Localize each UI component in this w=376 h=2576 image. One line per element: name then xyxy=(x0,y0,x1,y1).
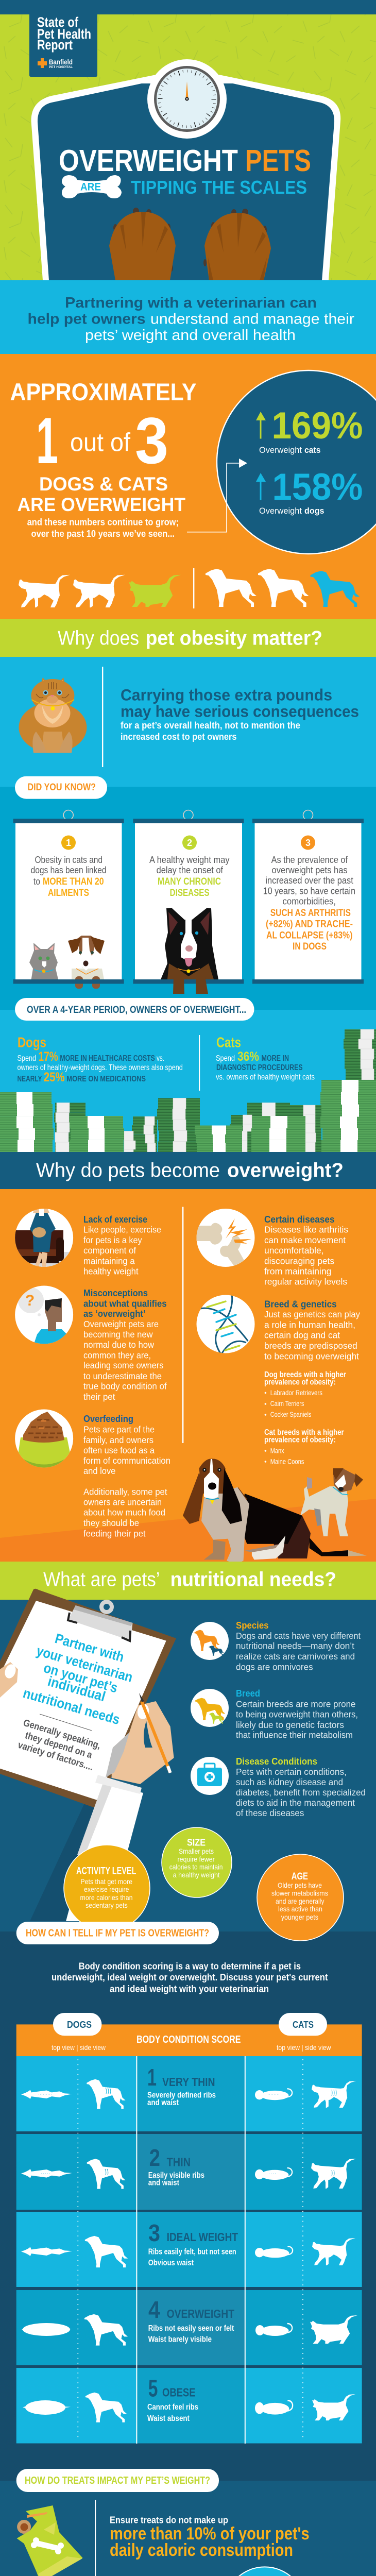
table header: top view | side view xyxy=(52,2043,106,2052)
text: certain diseases: from maintaining xyxy=(264,1266,332,1277)
card 3: comorbidities: AL COLLAPSE (+83%) xyxy=(266,930,352,941)
factor: activity level: more calories than xyxy=(80,1893,133,1902)
row 1: very thin: VERY THIN xyxy=(162,2075,215,2089)
text: treats: daily caloric consumption xyxy=(110,2540,293,2560)
list: dog breeds xyxy=(264,1370,346,1418)
hero background xyxy=(0,14,376,280)
factor: species: dogs are omnivores xyxy=(236,1662,313,1672)
pill: how can I tell: HOW CAN I TELL IF MY PET IS OVERWEIGHT? xyxy=(26,1927,209,1939)
factor: age xyxy=(257,1854,344,1941)
row 1: very thin: 1 xyxy=(147,2064,157,2091)
factor: size: Smaller pets xyxy=(179,1847,214,1855)
list: cat breeds: prevalence of obesity: xyxy=(264,1436,336,1445)
card 2: chronic diseases: MANY CHRONIC xyxy=(158,876,221,887)
card 3: comorbidities: increased over the past xyxy=(265,875,353,886)
row 5: obese: OBESE xyxy=(162,2385,196,2399)
panel: prevalence: DOGS & CATS xyxy=(39,473,168,495)
card 1: ailments: AILMENTS xyxy=(48,888,89,899)
row 3: ideal weight: 3 xyxy=(148,2219,160,2246)
card 1: ailments: Obesity in cats and xyxy=(35,855,102,865)
text: dogs costs: 25% xyxy=(44,1070,65,1084)
factor: disease conditions: of these diseases xyxy=(236,1808,304,1818)
list: cat breeds: Cat breeds with a higher xyxy=(264,1428,344,1437)
text: breed and genetics xyxy=(264,1299,360,1361)
card 2: chronic diseases: 2 xyxy=(187,838,192,848)
text: overfeeding: about how much food xyxy=(83,1507,165,1518)
text: breed and genetics: a role in human health, xyxy=(264,1320,355,1330)
icon: weighing scale xyxy=(31,59,340,280)
factor: species: Species xyxy=(236,1620,269,1631)
factor: activity level: Pets that get more xyxy=(80,1877,132,1886)
factor: activity level xyxy=(64,1845,150,1931)
panel: prevalence: and these numbers continue to grow; xyxy=(27,517,179,528)
stat circle: 158% xyxy=(272,466,363,508)
factor: age: slower metabolisms xyxy=(271,1889,328,1897)
icon: man with question mark xyxy=(15,1286,73,1350)
panel: treats background xyxy=(0,2481,376,2576)
heading: why does pet obesity matter xyxy=(0,619,376,657)
panel: prevalence: 1 xyxy=(36,404,58,477)
heading: why do pets become overweight: overweight? xyxy=(227,1159,344,1182)
clipboard text: your veterinarian xyxy=(35,1643,134,1685)
card 3: comorbidities xyxy=(252,810,364,984)
icon: woman on couch xyxy=(15,1208,73,1273)
text: treats: Ensure treats do not make up xyxy=(110,2515,228,2526)
stat circle: Overweight xyxy=(259,506,302,516)
panel: prevalence: ARE OVERWEIGHT xyxy=(18,494,185,515)
card 3: comorbidities: 3 xyxy=(305,838,311,848)
cat and dog silhouettes xyxy=(19,568,360,608)
pill: over a 4-year period xyxy=(15,998,254,1021)
factor: activity level: sedentary pets xyxy=(86,1901,128,1909)
factor: species: realize cats are carnivores and xyxy=(236,1651,355,1662)
card 2: chronic diseases: delay the onset of xyxy=(157,865,224,875)
card 3: comorbidities: (+82%) AND TRACHE- xyxy=(266,919,353,930)
text: certain diseases xyxy=(264,1214,348,1287)
icon: man with question mark: ? xyxy=(25,1292,35,1309)
panel: prevalence: over the past 10 years we’ve seen... xyxy=(31,529,175,539)
panel: costs background xyxy=(0,1010,376,1152)
panel: prevalence xyxy=(0,354,376,619)
title xyxy=(59,144,311,198)
text: cats costs xyxy=(216,1035,315,1082)
text: breed and genetics: to becoming overweight xyxy=(264,1351,359,1361)
icon: vet hands with pen xyxy=(0,1662,174,1921)
factor: breed: that influence their metabolism xyxy=(236,1730,353,1740)
list: dog breeds: Cairn Terriers xyxy=(270,1399,304,1408)
text: breed and genetics: breeds are predisposed xyxy=(264,1341,357,1351)
text: misconceptions: leading some owners xyxy=(83,1360,164,1370)
heading: carrying extra pounds xyxy=(121,686,359,742)
icon: collie paws xyxy=(173,976,208,994)
factor: size: SIZE xyxy=(187,1837,206,1849)
list: cat breeds xyxy=(264,1428,344,1466)
intro panel: understand and manage their xyxy=(150,311,354,328)
row 2: thin: 2 xyxy=(149,2144,160,2171)
text: misconceptions: common they are, xyxy=(83,1350,151,1361)
text: lack of exercise: healthy weight xyxy=(83,1266,139,1277)
stat circle: cats xyxy=(304,445,320,455)
panel: prevalence: out of xyxy=(70,428,130,456)
intro panel: help pet owners xyxy=(28,311,145,328)
pill: did you know: DID YOU KNOW? xyxy=(28,782,96,793)
text: certain diseases: uncomfortable, xyxy=(264,1245,324,1256)
title: PETS xyxy=(245,144,311,178)
factor: disease conditions: diets to aid in the management xyxy=(236,1798,355,1808)
factor: species: Dogs and cats have very different xyxy=(236,1631,361,1641)
heading: nutritional needs: nutritional needs? xyxy=(170,1568,336,1590)
factor: disease conditions: Disease Conditions xyxy=(236,1756,317,1767)
text: dogs costs: Spend xyxy=(18,1054,36,1063)
card 3: comorbidities: comorbidities, xyxy=(282,896,336,907)
text: certain diseases: can make movement xyxy=(264,1235,346,1245)
factor: age: AGE xyxy=(292,1871,308,1882)
arrow xyxy=(187,459,247,532)
factor: species: nutritional needs—many don’t xyxy=(236,1640,354,1651)
heading: why does pet obesity matter: pet obesity matter? xyxy=(146,628,322,649)
logo panel: State of Pet Health Report: Pet Health xyxy=(37,26,91,42)
row backgrounds xyxy=(16,2056,362,2444)
logo panel: State of Pet Health Report: PET HOSPITAL xyxy=(49,65,73,69)
text: overfeeding: Pets are part of the xyxy=(83,1424,155,1434)
text: lack of exercise: Lack of exercise xyxy=(83,1214,147,1225)
icon: basset hound xyxy=(183,1459,367,1564)
text: overfeeding: feeding their pet xyxy=(83,1528,146,1538)
text: misconceptions: as ‘overweight’ xyxy=(83,1309,146,1319)
card 2: chronic diseases: DISEASES xyxy=(170,888,210,899)
text: misconceptions: normal due to how xyxy=(83,1340,154,1350)
text: dogs costs: NEARLY xyxy=(18,1075,42,1083)
card 1: ailments: dogs has been linked xyxy=(31,865,107,875)
factor: age: and are generally xyxy=(276,1897,324,1905)
text: lack of exercise xyxy=(83,1214,161,1277)
heading: why do pets become overweight: Why do pets become xyxy=(36,1159,220,1182)
clipboard text: on your pet’s xyxy=(42,1660,119,1696)
title: OVERWEIGHT xyxy=(59,144,238,178)
factor: breed: Certain breeds are more prone xyxy=(236,1699,355,1709)
row 1: very thin: Severely defined ribs xyxy=(147,2091,216,2100)
text: breed and genetics: Breed & genetics xyxy=(264,1299,337,1310)
text: overfeeding: family, and owners xyxy=(83,1435,153,1445)
factor: age: younger pets xyxy=(281,1913,318,1921)
table header xyxy=(16,2013,362,2056)
list: dog breeds: Labrador Retrievers xyxy=(270,1388,322,1397)
text: lack of exercise: component of xyxy=(83,1245,136,1256)
icon: treat bag xyxy=(17,2505,83,2576)
factor: activity level: ACTIVITY LEVEL xyxy=(76,1866,136,1877)
text: dogs costs: vs. xyxy=(157,1054,164,1063)
text: overfeeding xyxy=(83,1414,170,1538)
text: cats costs: Spend xyxy=(216,1054,235,1063)
text: body condition intro: underweight, ideal weight or overweight. Discuss your pet's current xyxy=(52,1972,328,1982)
title: ARE xyxy=(80,181,101,193)
row 2: thin: and waist xyxy=(148,2179,180,2188)
text: misconceptions: their pet xyxy=(83,1392,115,1402)
text: dogs costs xyxy=(18,1035,183,1084)
icon: overflowing food bowl xyxy=(15,1410,73,1468)
factor: breed xyxy=(191,1688,358,1740)
list: dog breeds: Cocker Spaniels xyxy=(270,1410,311,1418)
factor: age: less active than xyxy=(278,1905,322,1913)
factor: breed: likely due to genetic factors xyxy=(236,1720,344,1730)
heading: carrying extra pounds: for a pet’s overall health, not to mention the xyxy=(121,720,300,731)
text: misconceptions: becoming the new xyxy=(83,1329,153,1340)
body condition score table xyxy=(16,2013,362,2444)
factor: disease conditions: Pets with certain conditions, xyxy=(236,1767,347,1777)
text: certain diseases: regular activity levels xyxy=(264,1277,347,1287)
row 2: thin xyxy=(21,2144,356,2189)
logo panel: State of Pet Health Report: State of xyxy=(37,14,79,30)
factor: species xyxy=(191,1620,361,1672)
factor: disease conditions: diabetes, benefit from specialized xyxy=(236,1787,366,1798)
logo panel: State of Pet Health Report xyxy=(29,14,97,77)
icon: fat orange cat xyxy=(19,677,87,753)
panel: consequences xyxy=(0,657,376,787)
stat circle: Overweight xyxy=(259,445,302,455)
row 1: very thin xyxy=(21,2064,356,2109)
row 4: overweight: Ribs not easily seen or felt xyxy=(148,2324,234,2333)
icon: border collie xyxy=(161,908,218,979)
factor: size: a healthy weight xyxy=(173,1871,220,1879)
card 1: ailments: 1 xyxy=(66,838,71,848)
card 2: chronic diseases: A healthy weight may xyxy=(149,855,230,865)
title: TIPPING THE SCALES xyxy=(131,177,307,198)
text: treats xyxy=(110,2515,310,2560)
text: misconceptions: Overweight pets are xyxy=(83,1319,159,1329)
heading: nutritional needs: What are pets’ xyxy=(43,1568,160,1590)
text: lack of exercise: maintaining a xyxy=(83,1256,135,1266)
text: cats costs: 36% xyxy=(237,1049,259,1064)
list: cat breeds: Manx xyxy=(270,1446,284,1454)
pill: treats xyxy=(16,2469,219,2492)
card 3: comorbidities: As the prevalence of xyxy=(271,855,348,865)
logo panel: State of Pet Health Report: Report xyxy=(37,37,73,53)
factor: disease conditions xyxy=(191,1756,366,1818)
money stacks xyxy=(0,1029,376,1152)
text: overfeeding: owners are uncertain xyxy=(83,1497,162,1507)
panel: did you know background xyxy=(0,787,376,1010)
row 5: obese: Waist absent xyxy=(147,2414,190,2423)
text: certain diseases: Diseases like arthritis xyxy=(264,1225,348,1235)
logo panel: State of Pet Health Report: Banfield xyxy=(49,58,73,66)
card 1: ailments: MORE THAN 20 xyxy=(43,876,104,887)
callout: slice of cheese xyxy=(224,2567,305,2576)
pill: treats: HOW DO TREATS IMPACT MY PET’S WEIGHT? xyxy=(25,2475,210,2486)
text: cats costs: DIAGNOSTIC PROCEDURES xyxy=(216,1063,303,1072)
icon: grey cat and jack russell xyxy=(29,936,105,989)
intro panel: pets’ weight and overall health xyxy=(85,327,296,344)
list: dog breeds: prevalence of obesity: xyxy=(264,1378,336,1386)
divider xyxy=(95,2500,96,2576)
shadow of arm xyxy=(30,1802,96,1921)
list: cat breeds: Maine Coons xyxy=(270,1458,304,1466)
text: misconceptions xyxy=(83,1288,167,1402)
heading: carrying extra pounds: may have serious consequences xyxy=(121,702,359,720)
heading: carrying extra pounds: Carrying those extra pounds xyxy=(121,686,332,704)
panel: body condition background xyxy=(0,1931,376,2481)
heading: carrying extra pounds: increased cost to pet owners xyxy=(121,731,237,742)
row 3: ideal weight: IDEAL WEIGHT xyxy=(167,2230,238,2244)
row 3: ideal weight: Ribs easily felt, but not seen xyxy=(148,2248,236,2257)
row 4: overweight: Waist barely visible xyxy=(148,2335,212,2344)
pill: how can I tell xyxy=(16,1922,219,1944)
card 3: comorbidities: IN DOGS xyxy=(293,941,327,952)
icon: joint bones xyxy=(196,1209,254,1268)
clipboard: they depend on a xyxy=(24,1730,94,1761)
stat circle xyxy=(217,370,376,554)
heading: why do pets become overweight xyxy=(0,1152,376,1189)
text: dogs costs: MORE IN HEALTHCARE COSTS xyxy=(60,1054,155,1063)
text: cats costs: MORE IN xyxy=(262,1054,289,1063)
card 3: comorbidities: 10 years, so have certain xyxy=(263,886,355,896)
clipboard text: nutritional needs xyxy=(21,1685,122,1727)
row 3: ideal weight: Obvious waist xyxy=(148,2259,194,2267)
text: overfeeding: form of communication xyxy=(83,1455,170,1466)
table header: DOGS xyxy=(67,2020,92,2030)
intro panel xyxy=(0,280,376,354)
text: lack of exercise: for pets is a key xyxy=(83,1235,142,1245)
pill: did you know xyxy=(15,776,107,799)
panel: causes background xyxy=(0,1189,376,1562)
clipboard text xyxy=(21,1631,134,1727)
text: body condition intro: and ideal weight with your veterinarian xyxy=(110,1984,269,1994)
clipboard text: Partner with xyxy=(53,1631,126,1665)
text: overfeeding: they should be xyxy=(83,1518,139,1528)
text: lack of exercise: Like people, exercise xyxy=(83,1225,161,1235)
heading: nutritional needs xyxy=(0,1562,376,1600)
stat circle: dogs xyxy=(304,506,324,516)
factor: breed: Breed xyxy=(236,1688,260,1699)
divider xyxy=(199,1035,200,1091)
clipboard: Generally speaking, xyxy=(22,1718,102,1751)
row 4: overweight: OVERWEIGHT xyxy=(167,2307,234,2320)
card 2: chronic diseases xyxy=(133,810,244,994)
factor: disease conditions: such as kidney disease and xyxy=(236,1777,343,1787)
heading: why does pet obesity matter: Why does xyxy=(58,628,139,649)
text: certain diseases: discouraging pets xyxy=(264,1256,334,1266)
clipboard: variety of factors.... xyxy=(16,1740,95,1773)
text: body condition intro xyxy=(52,1961,328,1994)
text: treats: more than 10% of your pet's xyxy=(110,2524,310,2544)
text: certain diseases: Certain diseases xyxy=(264,1214,335,1225)
pill: over a 4-year period: OVER A 4-YEAR PERIOD, OWNERS OF OVERWEIGHT... xyxy=(27,1005,246,1015)
row 1: very thin: and waist xyxy=(147,2098,179,2107)
factor: age: Older pets have xyxy=(278,1881,322,1889)
text: breed and genetics: certain dog and cat xyxy=(264,1330,340,1341)
table header: CATS xyxy=(293,2020,314,2030)
factor: size: calories to maintain xyxy=(169,1863,223,1871)
factor: size: require fewer xyxy=(177,1855,215,1863)
panel: nutrition background xyxy=(0,1600,376,1931)
card 3: comorbidities: SUCH AS ARTHRITIS xyxy=(270,908,351,919)
row 5: obese: 5 xyxy=(148,2375,158,2401)
row 2: thin: Easily visible ribs xyxy=(148,2171,204,2180)
factor: activity level: exercise require xyxy=(84,1885,129,1893)
stat circle: 169% xyxy=(272,405,363,447)
text: dogs costs: Dogs xyxy=(18,1035,46,1050)
table header: top view | side view xyxy=(277,2043,331,2052)
text: cats costs: Cats xyxy=(216,1035,241,1050)
card 3: comorbidities: overweight pets has xyxy=(272,865,348,875)
text: misconceptions: about what qualifies xyxy=(83,1298,167,1309)
card 1: ailments xyxy=(13,810,124,989)
text: cats costs: vs. owners of healthy weight cats xyxy=(216,1073,315,1082)
text: breed and genetics: Just as genetics can play xyxy=(264,1309,360,1319)
row 5: obese xyxy=(23,2375,355,2423)
text: misconceptions: Misconceptions xyxy=(83,1288,148,1298)
factor: size xyxy=(162,1827,232,1897)
row 3: ideal weight xyxy=(21,2219,355,2267)
icon: DNA helix xyxy=(197,1294,254,1355)
row 4: overweight xyxy=(22,2296,357,2346)
text: overfeeding: Overfeeding xyxy=(83,1414,133,1424)
icon: terrier xyxy=(300,1468,363,1536)
text: overfeeding: Additionally, some pet xyxy=(83,1487,167,1497)
row 5: obese: Cannot feel ribs xyxy=(147,2403,198,2412)
card 1: ailments: to xyxy=(33,876,40,887)
icon: dog paws on scale xyxy=(109,208,271,280)
factor: breed: to being overweight than others, xyxy=(236,1709,358,1720)
text: dogs costs: MORE ON MEDICATIONS xyxy=(66,1075,146,1083)
header top bar xyxy=(0,0,376,14)
text: overfeeding: often use food as a xyxy=(83,1445,155,1455)
text: misconceptions: to underestimate the xyxy=(83,1371,162,1381)
row 2: thin: THIN xyxy=(167,2156,191,2169)
text: dogs costs: owners of healthy-weight dogs. These owners also spend xyxy=(18,1063,183,1072)
panel: prevalence: 3 xyxy=(135,404,168,477)
text: body condition intro: Body condition scoring is a way to determine if a pet is xyxy=(79,1961,301,1971)
list: dog breeds: Dog breeds with a higher xyxy=(264,1370,346,1379)
row 4: overweight: 4 xyxy=(148,2296,160,2323)
panel: prevalence: APPROXIMATELY xyxy=(10,378,197,405)
clipboard xyxy=(0,1589,176,1808)
text: dogs costs: 17% xyxy=(38,1049,58,1064)
text: overfeeding: and love xyxy=(83,1466,115,1476)
clipboard text: individual xyxy=(46,1673,107,1704)
text: misconceptions: true body condition of xyxy=(83,1381,167,1392)
intro panel: Partnering with a veterinarian can xyxy=(65,295,317,311)
table header: BODY CONDITION SCORE xyxy=(136,2034,241,2045)
